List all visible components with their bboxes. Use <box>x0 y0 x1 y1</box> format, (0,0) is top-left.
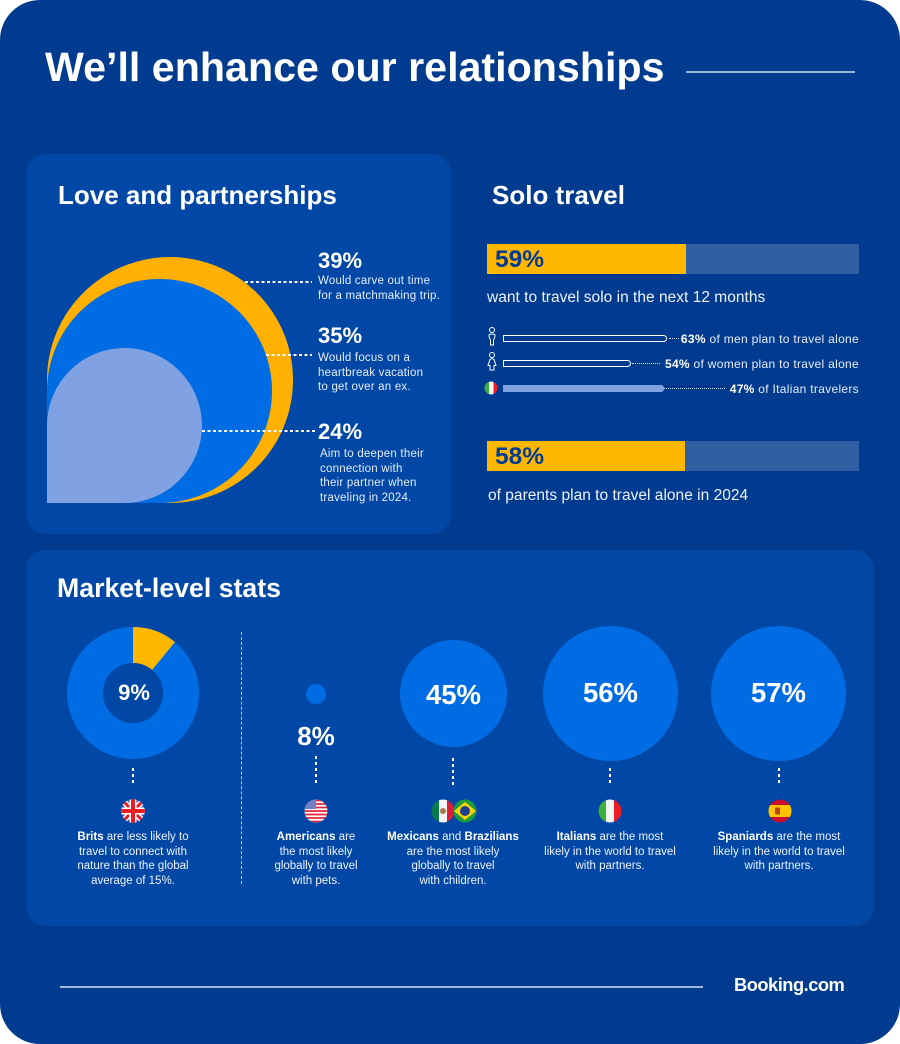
row: men 63% <box>503 332 859 346</box>
bubble: 8% <box>306 684 326 704</box>
caption: Americans: with pets. <box>292 874 340 886</box>
row: women 54%: 54% of women plan to travel alone <box>665 357 859 371</box>
bar: 58% parents <box>487 441 859 471</box>
icon: Mexico and Brazil flags <box>432 800 476 822</box>
caption: Americans: the most likely <box>280 846 352 858</box>
icon: Italy flag <box>598 800 622 822</box>
stat: 24%: connection with <box>320 462 403 474</box>
logo: Booking.com: Booking.com <box>734 974 844 995</box>
caption: Italians: Italians are the most <box>557 831 663 843</box>
caption: Italians <box>544 831 676 872</box>
stat: 39%: for a matchmaking trip. <box>318 290 440 302</box>
bar: 59% want to travel solo: 59% <box>495 246 544 273</box>
bubble: 57% <box>711 626 846 761</box>
stat: 24%: traveling in 2024. <box>320 492 412 504</box>
caption: Spaniards: Spaniards are the most <box>718 831 840 843</box>
stat: 39%: Would carve out time <box>318 275 430 287</box>
icon: Spain flag <box>768 800 792 822</box>
divider <box>241 632 242 884</box>
bubble: 57%: 57% <box>751 677 806 708</box>
caption: Americans: globally to travel <box>274 860 358 872</box>
stat: 35%: 35% <box>318 323 362 348</box>
bubble: 56%: 56% <box>583 677 638 708</box>
value: 8%: 8% <box>297 721 335 751</box>
bar: 58% parents: 58% <box>495 443 544 470</box>
stat: 24%: Aim to deepen their <box>320 448 424 460</box>
row: Italian travelers 47% <box>503 382 859 396</box>
caption: 59% bar: want to travel solo in the next 12 months <box>487 289 765 306</box>
stat: 35%: heartbreak vacation <box>318 366 423 378</box>
caption: Spaniards: with partners. <box>744 860 814 872</box>
caption: Americans: Americans are <box>277 831 355 843</box>
footer rule <box>60 986 703 988</box>
stat: 24%: their partner when <box>320 477 417 489</box>
stat: 35%: to get over an ex. <box>318 381 411 393</box>
stat: 24%: 24% <box>318 419 362 444</box>
stat: 39%: 39% <box>318 248 362 273</box>
heading: love and partnerships: Love and partnerships <box>58 180 337 210</box>
icon: US flag <box>304 800 328 822</box>
caption: Brits: Brits are less likely to <box>77 831 189 843</box>
stat: 24% <box>318 419 424 504</box>
row: women 54% <box>503 357 859 371</box>
heading: market-level stats: Market-level stats <box>57 573 281 603</box>
caption: Mexicans and Brazilians: with children. <box>419 874 487 886</box>
chart: donut 9% <box>67 627 199 759</box>
connectors <box>132 756 780 785</box>
stat: 39% <box>318 248 440 302</box>
bubble: 45% <box>400 640 507 747</box>
heading: solo travel: Solo travel <box>492 180 625 210</box>
caption: Italians: likely in the world to travel <box>544 846 676 858</box>
caption: Italians: with partners. <box>575 860 645 872</box>
row: Italian travelers 47%: 47% of Italian travelers <box>730 382 859 396</box>
icon: woman <box>487 352 497 370</box>
caption: Americans <box>274 831 358 886</box>
caption: Brits: travel to connect with <box>79 846 187 858</box>
caption: Spaniards: likely in the world to travel <box>713 846 845 858</box>
title: We’ll enhance our relationships <box>45 44 664 90</box>
caption: Mexicans and Brazilians: Mexicans and Brazilians <box>387 831 519 843</box>
bubble: 56% <box>543 626 678 761</box>
caption: Mexicans and Brazilians: are the most likely <box>407 846 499 858</box>
caption: Spaniards <box>713 831 845 872</box>
caption: Mexicans and Brazilians <box>387 831 519 886</box>
stat: 35% <box>318 323 423 393</box>
icon: Italy flag small <box>484 382 498 394</box>
icon: UK flag <box>121 799 145 823</box>
caption: Brits <box>77 831 189 886</box>
bar: 59% want to travel solo <box>487 244 859 274</box>
caption: Brits: average of 15%. <box>91 874 175 886</box>
bubble: 45%: 45% <box>426 679 481 710</box>
caption: Mexicans and Brazilians: globally to travel <box>411 860 495 872</box>
caption: 58% bar: of parents plan to travel alone in 2024 <box>488 487 748 504</box>
icon: man <box>488 327 496 346</box>
row: men 63%: 63% of men plan to travel alone <box>681 332 859 346</box>
stat: 35%: Would focus on a <box>318 352 410 364</box>
chart: donut 9%: 9% <box>118 680 150 705</box>
chart: nested teardrop circles <box>47 257 315 503</box>
panel: love and partnerships <box>26 154 451 534</box>
caption: Brits: nature than the global <box>77 860 189 872</box>
panel: market-level stats <box>26 550 874 926</box>
